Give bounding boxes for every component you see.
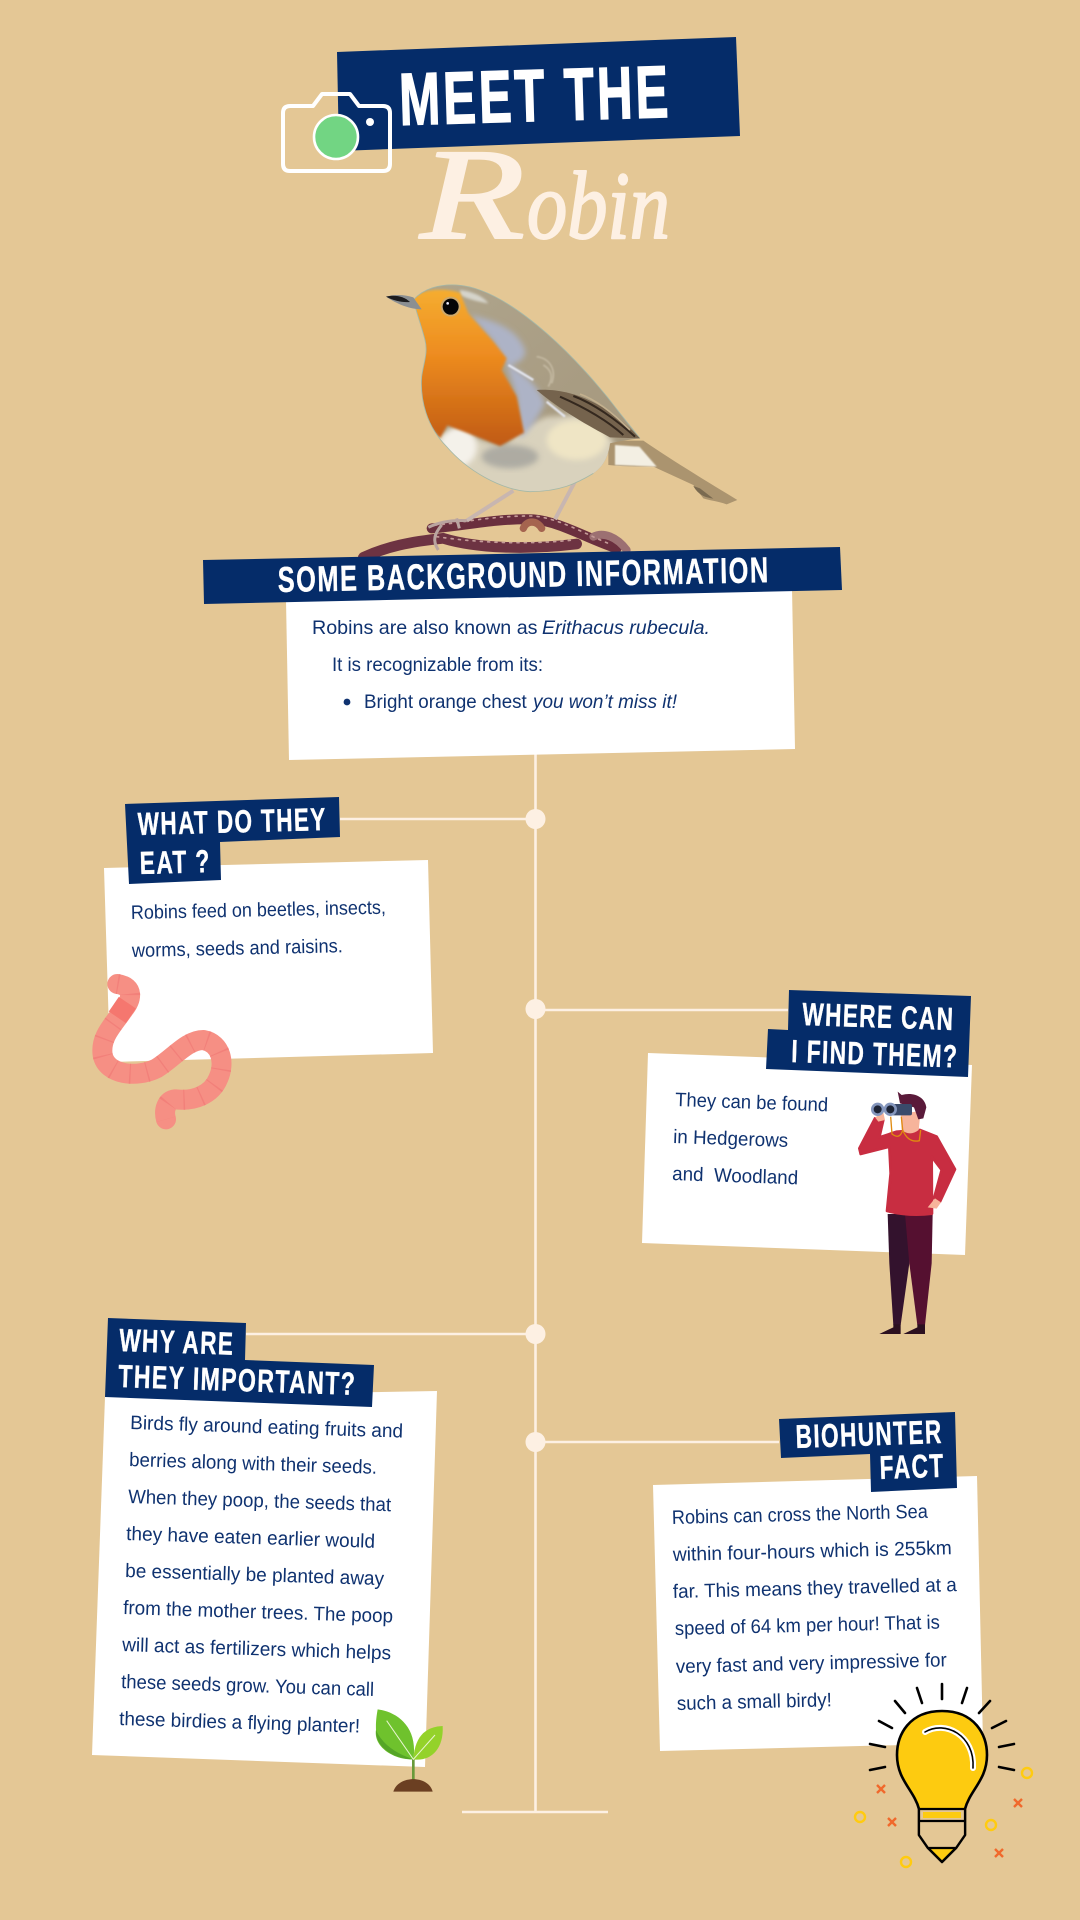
- title script: Robin: obin: [527, 152, 670, 259]
- text block: you won’t miss it!: [531, 691, 678, 713]
- icon: camera: [283, 94, 390, 171]
- timeline: central line and connectors: [246, 750, 788, 1812]
- panel: biohunter fact: [653, 1412, 983, 1751]
- text block: in Hedgerows: [673, 1126, 789, 1152]
- heading: THEY IMPORTANT?: [118, 1358, 357, 1402]
- text block: from the mother trees. The poop: [123, 1597, 394, 1627]
- body: [414, 285, 640, 492]
- text block: speed of 64 km per hour! That is: [675, 1612, 940, 1640]
- heading: BIOHUNTER: [795, 1413, 943, 1455]
- beak: [386, 295, 422, 309]
- eye: [441, 297, 461, 317]
- text block: will act as fertilizers which helps: [121, 1634, 392, 1664]
- text block: worms, seeds and raisins.: [131, 935, 343, 962]
- text block: It is recognizable from its:: [332, 654, 543, 676]
- icon: worm: [102, 984, 221, 1119]
- text block: [672, 1501, 957, 1715]
- text block: and Woodland: [672, 1163, 799, 1189]
- heading: WHY ARE: [119, 1322, 235, 1362]
- icon: light bulb: [855, 1684, 1032, 1867]
- panel: some background information: [203, 547, 842, 760]
- text block: far. This means they travelled at a: [673, 1574, 957, 1603]
- text block: [131, 897, 386, 962]
- text block: When they poop, the seeds that: [128, 1486, 392, 1516]
- heading banner: [125, 797, 340, 884]
- text block: Erithacus rubecula.: [542, 617, 710, 639]
- text block: They can be found: [675, 1089, 829, 1116]
- text block: these seeds grow. You can call: [121, 1671, 374, 1701]
- wing: [537, 390, 640, 438]
- text block: berries along with their seeds.: [129, 1449, 377, 1479]
- panel: where can i find them: [642, 990, 972, 1255]
- icon: sprout: [376, 1709, 443, 1792]
- text block: [312, 617, 710, 713]
- text block: Robins feed on beetles, insects,: [131, 897, 386, 924]
- title script: Robin: R: [419, 123, 525, 267]
- text block: these birdies a flying planter!: [119, 1708, 360, 1738]
- heading: [118, 1322, 357, 1402]
- heading: WHAT DO THEY: [137, 801, 327, 842]
- text block: very fast and very impressive for: [676, 1649, 948, 1678]
- tail: [608, 441, 737, 504]
- twig: [363, 516, 627, 557]
- heading: [137, 801, 327, 881]
- heading banner: [203, 547, 842, 604]
- heading: SOME BACKGROUND INFORMATION: [277, 549, 770, 600]
- text block: [672, 1089, 829, 1189]
- title banner: MEET THE: [398, 50, 672, 141]
- heading: FACT: [879, 1447, 945, 1486]
- text block: Bright orange chest: [364, 691, 532, 713]
- panel: what do they eat: [104, 797, 433, 1062]
- text block: within four-hours which is 255km: [672, 1537, 952, 1566]
- heading banner: [779, 1412, 957, 1492]
- text block: Robins can cross the North Sea: [672, 1501, 928, 1529]
- body outline: [413, 285, 640, 492]
- heading banner: [766, 990, 971, 1077]
- text block: [119, 1412, 403, 1738]
- heading banner: [105, 1318, 374, 1407]
- text block: Birds fly around eating fruits and: [130, 1412, 403, 1443]
- text block: such a small birdy!: [677, 1689, 832, 1715]
- text block: be essentially be planted away: [125, 1560, 385, 1590]
- text block: they have eaten earlier would: [126, 1523, 375, 1553]
- legs: [467, 478, 577, 521]
- heading: EAT ?: [139, 843, 211, 881]
- illustration: man with binoculars: [859, 1092, 955, 1334]
- title banner: [337, 37, 740, 151]
- heading: [795, 1413, 945, 1486]
- heading: I FIND THEM?: [791, 1033, 959, 1075]
- robin illustration: [363, 270, 737, 557]
- heading: WHERE CAN: [802, 996, 955, 1037]
- panel: why are they important: [92, 1318, 437, 1767]
- text block: Robins are also known as: [312, 617, 543, 639]
- heading: [791, 996, 959, 1075]
